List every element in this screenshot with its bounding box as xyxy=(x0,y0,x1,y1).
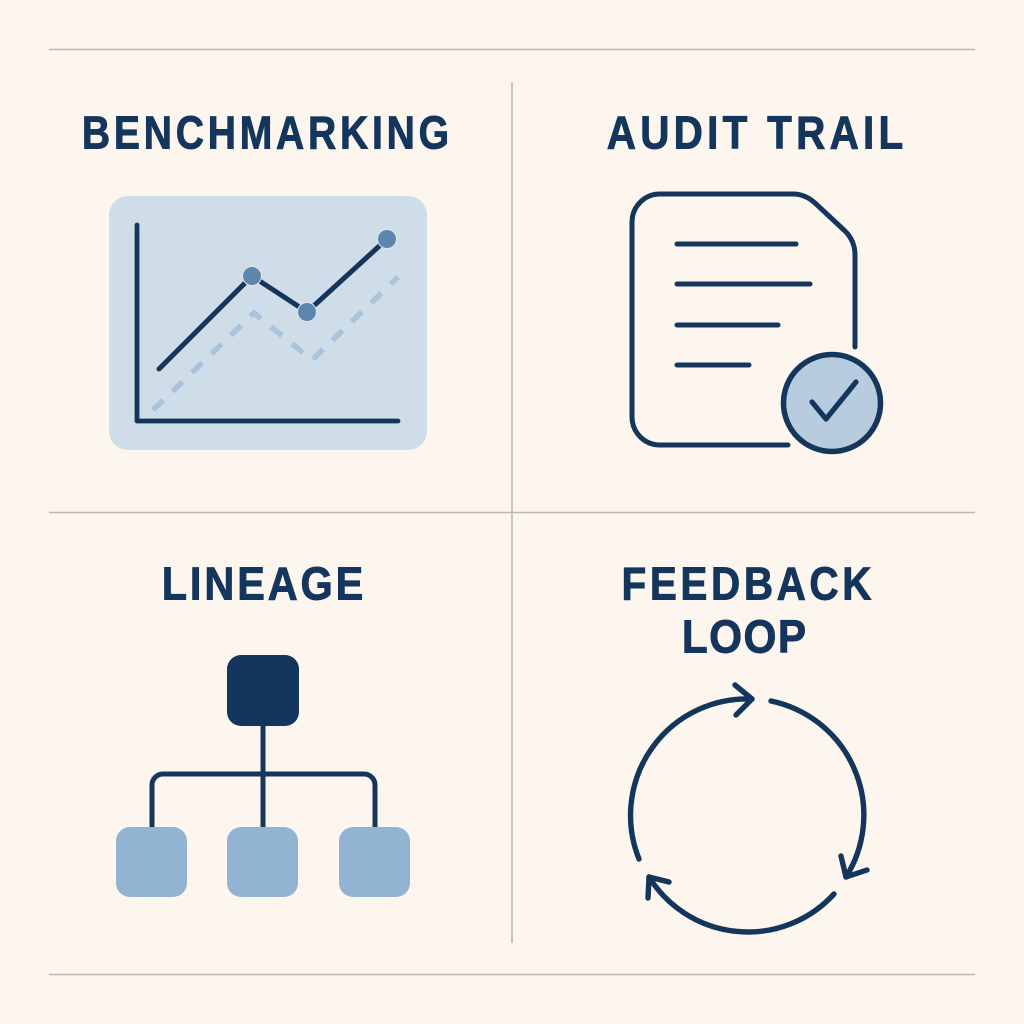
line chart icon xyxy=(109,196,427,450)
heading: feedback loop: FEEDBACK xyxy=(622,559,871,610)
panel: lineage xyxy=(116,559,410,897)
heading: audit trail: AUDIT TRAIL xyxy=(607,108,903,159)
circular arrows icon xyxy=(631,685,867,932)
panel: feedback loop xyxy=(622,559,871,932)
heading: feedback loop xyxy=(622,559,871,663)
panel: audit trail xyxy=(607,108,903,451)
heading: lineage: LINEAGE xyxy=(162,559,363,610)
heading: feedback loop: LOOP xyxy=(682,612,806,663)
panel: benchmarking xyxy=(82,108,449,450)
hierarchy tree icon xyxy=(116,655,410,897)
heading: benchmarking: BENCHMARKING xyxy=(82,108,449,159)
document with check icon xyxy=(632,194,880,452)
